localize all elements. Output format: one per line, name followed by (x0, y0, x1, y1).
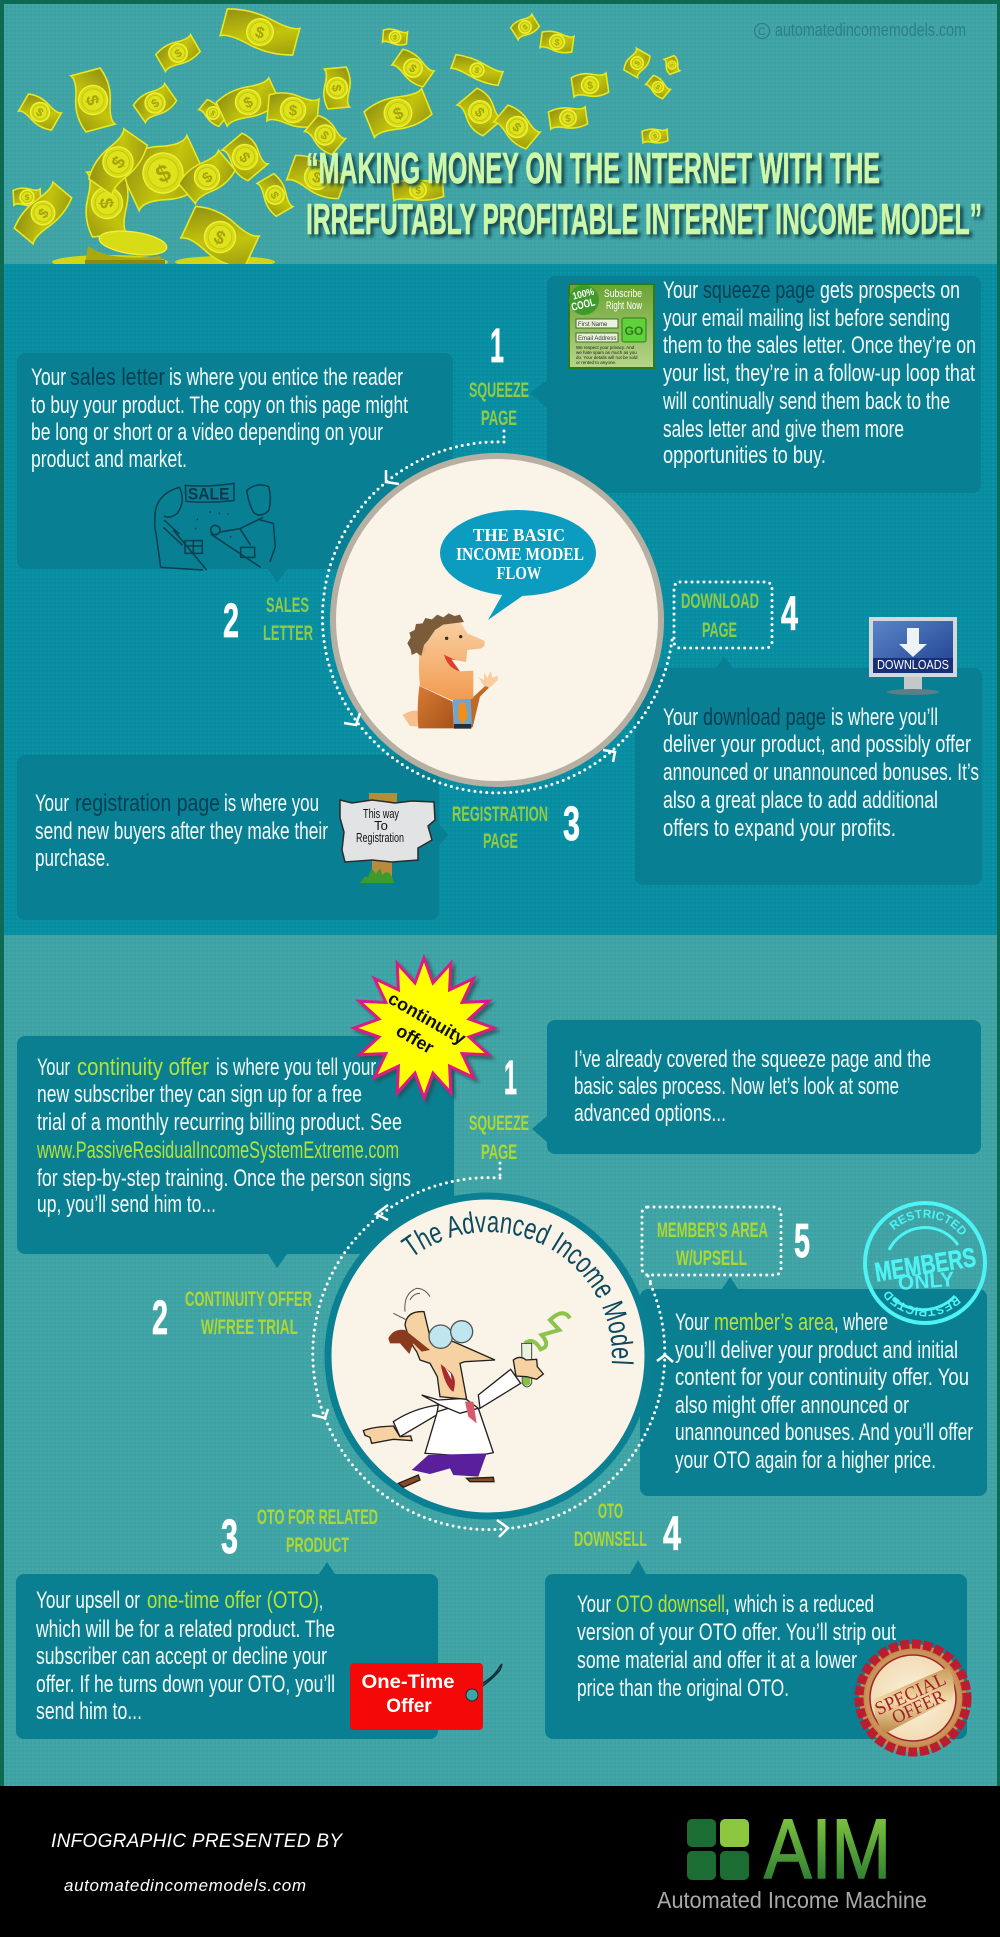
step 3: registration page: PAGE (483, 830, 518, 853)
icon: sale line drawing (155, 483, 275, 570)
step 5: member's area: 5 (794, 1215, 810, 1268)
icon: one-time offer tag: Offer (386, 1696, 432, 1717)
step 3: registration page: 3 (563, 798, 580, 851)
speech bubble: FLOW (496, 563, 542, 583)
step 4: download page: PAGE (702, 619, 737, 642)
step 4: download page: DOWNLOAD (681, 590, 759, 613)
starburst: continuity offer: continuity (385, 988, 469, 1048)
icon: subscribe form (569, 284, 654, 368)
text block: squeeze page (662, 277, 976, 469)
falling money illustration: $ (668, 63, 675, 68)
footer (0, 1786, 1000, 1937)
logo: AIM: Automated Income Machine (657, 1887, 927, 1913)
icon: downloads monitor: DOWNLOADS (877, 657, 949, 672)
icon: one-time offer tag (350, 1663, 502, 1730)
stamp: members only: RESTRICTED (889, 1210, 966, 1234)
text block: sales letter: product and market. (31, 446, 187, 473)
falling money illustration: $ (391, 104, 406, 124)
falling money illustration: $ (24, 192, 30, 202)
falling money illustration: $ (211, 226, 230, 249)
step 5: member's area: MEMBER’S AREA (657, 1219, 768, 1242)
falling money illustration: $ (82, 93, 104, 108)
text block: squeeze page: squeeze page (703, 277, 815, 304)
step 4: download page (674, 582, 798, 648)
icon: subscribe form: or rented to anyone. (576, 360, 616, 365)
seal: special offer: SPECIAL (872, 1669, 950, 1720)
falling money illustration: $ (587, 80, 594, 92)
footer credit: INFOGRAPHIC PRESENTED BY (51, 1831, 343, 1852)
text block: OTO downsell: Your (577, 1591, 611, 1618)
icon: registration sign (340, 793, 435, 883)
circle: advanced income model (324, 1192, 644, 1520)
text block: registration page: purchase. (35, 845, 110, 872)
step 2: continuity offer: W/FREE TRIAL (201, 1316, 298, 1339)
falling money illustration: $ (34, 205, 52, 221)
text block: download page: offers to expand your profits. (663, 815, 896, 842)
icon: subscribe form: Subscribe (604, 288, 642, 300)
falling money illustration: $ (199, 168, 217, 187)
step 1: squeeze page: SQUEEZE (469, 1112, 529, 1135)
icon: subscribe form: we hate spam as much as you (576, 350, 637, 355)
falling money illustration: $ (471, 105, 488, 120)
text block: sales letter: Your (31, 364, 66, 391)
step 4: OTO downsell: OTO (598, 1500, 623, 1523)
text block: continuity offer: up, you’ll send him to... (37, 1191, 216, 1218)
step 2: continuity offer (152, 1288, 312, 1345)
falling money illustration: $ (318, 128, 332, 143)
step 1: squeeze page (469, 1052, 529, 1164)
step 1: squeeze page: PAGE (481, 1141, 517, 1164)
icon: subscribe form: Right Now (606, 300, 642, 312)
text block: OTO downsell: price than the original OTO. (577, 1675, 789, 1702)
falling money illustration: $ (310, 169, 324, 188)
speech bubble: THE BASIC (473, 525, 565, 545)
flow ring: advanced model (312, 1163, 673, 1537)
footer credit (51, 1831, 343, 1895)
text block: download page: download page (703, 704, 826, 731)
step 1: squeeze page: 1 (490, 320, 504, 373)
icon: subscribe form: GO (625, 324, 643, 338)
text block: OTO downsell (577, 1591, 896, 1702)
watermark: C (758, 26, 766, 38)
text block: registration page: registration page (75, 790, 220, 817)
step 2: sales letter: LETTER (263, 622, 313, 645)
step 2: continuity offer: 2 (152, 1292, 168, 1345)
text block: one-time offer: one-time offer (OTO) (147, 1587, 319, 1614)
seal: special offer (859, 1644, 967, 1752)
text block: squeeze page: sales letter and give them more (663, 416, 904, 443)
starburst: continuity offer (354, 958, 494, 1098)
speech bubble: INCOME MODEL (456, 544, 584, 564)
arrow (312, 1409, 328, 1418)
step 5: member's area (642, 1207, 810, 1275)
step 1: squeeze page: SQUEEZE (469, 379, 529, 402)
text block: download page (663, 704, 979, 842)
text block: continuity offer: is where you tell your (216, 1054, 376, 1081)
text block: one-time offer (35, 1587, 335, 1725)
step 4: download page: 4 (781, 588, 798, 641)
text block: OTO downsell: some material and offer it at a lower (577, 1647, 857, 1674)
arrow (386, 470, 399, 484)
text block: sales letter: sales letter (70, 364, 165, 391)
text block: registration page: send new buyers after they make their (35, 818, 328, 845)
icon: subscribe form: First Name (578, 322, 608, 328)
stamp: members only: ONLY (897, 1268, 955, 1295)
step 2: sales letter: 2 (223, 595, 239, 648)
step 2: continuity offer: CONTINUITY OFFER (185, 1288, 312, 1311)
text block: download page: Your (663, 704, 698, 731)
icon: registration sign: Registration (356, 830, 404, 845)
text block: registration page (35, 790, 328, 872)
icon: downloads monitor (869, 617, 957, 695)
text block: continuity offer: www.PassiveResidualIncomeSystemExtreme.com (36, 1137, 399, 1164)
panel: download page (635, 617, 982, 885)
arrow (657, 1355, 673, 1362)
step 1: squeeze page: 1 (504, 1052, 517, 1105)
text block: continuity offer: new subscriber they can sign up for a free (37, 1081, 362, 1108)
step 2: sales letter: SALES (266, 594, 309, 617)
text block: continuity offer: Your (37, 1054, 70, 1081)
text block: recap: advanced options... (574, 1100, 726, 1127)
arrow (603, 750, 615, 762)
falling money illustration: $ (152, 159, 176, 189)
text block: registration page: is where you (224, 790, 319, 817)
stamp: members only (863, 1201, 987, 1325)
text block: download page: is where you’ll (831, 704, 938, 731)
text block: member's area: also might offer announced or (675, 1392, 909, 1419)
falling money illustration: $ (329, 84, 344, 92)
text block: squeeze page: Your (663, 277, 698, 304)
text block: member's area: member’s area (714, 1309, 834, 1336)
text block: member's area: Your (675, 1309, 709, 1336)
text block: continuity offer: for step-by-step training. Once the person signs (37, 1165, 411, 1192)
step 1: squeeze page: PAGE (481, 407, 517, 430)
text block: sales letter: be long or short or a video depending on your (31, 419, 383, 446)
step 2: sales letter (223, 594, 313, 648)
falling money illustration: $ (654, 84, 661, 92)
falling money illustration: $ (96, 197, 118, 210)
icon: mad scientist (363, 1288, 570, 1487)
falling money illustration: $ (253, 24, 266, 43)
step 4: OTO downsell: DOWNSELL (574, 1528, 647, 1551)
text block: one-time offer: offer. If he turns down your OTO, you’ll (36, 1671, 335, 1698)
falling money illustration: $ (653, 133, 658, 141)
icon: subscribe form: We respect your privacy. And (576, 345, 635, 350)
seal: special offer: OFFER (889, 1686, 949, 1729)
text block: one-time offer: Your upsell or (36, 1587, 140, 1614)
text block: one-time offer: subscriber can accept or decline your (36, 1643, 327, 1670)
icon: sale line drawing: SALE (188, 484, 229, 503)
arrow (376, 1205, 388, 1220)
circle: basic income model (333, 456, 661, 784)
text block: sales letter: is where you entice the reader (169, 364, 403, 391)
arrow (497, 1520, 508, 1537)
falling money illustration: $ (34, 106, 46, 120)
step 3: OTO for related product: PRODUCT (286, 1534, 349, 1557)
icon: subscribe form: do. Your details will not be sold (576, 355, 638, 360)
text block: sales letter: to buy your product. The copy on this page might (31, 392, 408, 419)
step 4: OTO downsell (574, 1500, 681, 1561)
step 3: OTO for related product (221, 1506, 378, 1564)
falling money illustration: $ (393, 34, 397, 42)
step 3: OTO for related product: 3 (221, 1511, 238, 1564)
text block: OTO downsell: version of your OTO offer. You’ll strip out (577, 1619, 896, 1646)
text block: one-time offer: , (319, 1587, 323, 1614)
icon: registration sign: This way (363, 806, 399, 821)
falling money illustration: $ (288, 102, 298, 120)
icon: cartoon man (403, 613, 498, 729)
falling money illustration: $ (565, 113, 572, 125)
falling money illustration: $ (473, 65, 481, 76)
text block: recap (574, 1046, 931, 1127)
falling money illustration: $ (509, 120, 524, 135)
panel: squeeze page recap (532, 1020, 981, 1154)
arrow (344, 713, 360, 725)
falling money illustration: $ (415, 185, 422, 197)
step 4: OTO downsell: 4 (663, 1508, 681, 1561)
text block: member's area (675, 1309, 973, 1474)
text block: continuity offer: continuity offer (77, 1054, 209, 1081)
footer credit: automatedincomemodels.com (64, 1876, 306, 1895)
falling money illustration: $ (632, 58, 643, 67)
panel: squeeze page (530, 276, 981, 493)
falling money illustration: $ (148, 95, 162, 111)
falling money illustration: $ (107, 153, 130, 172)
step 5: member's area: W/UPSELL (676, 1247, 747, 1270)
icon: subscribe form: 100% (571, 287, 595, 303)
falling money illustration: $ (235, 149, 254, 167)
icon: subscribe form: Email Address (578, 336, 616, 342)
text block: member's area: , where (834, 1309, 888, 1336)
text block: OTO downsell: OTO downsell (616, 1591, 725, 1618)
step 3: registration page (452, 798, 580, 853)
panel: continuity offer (17, 1036, 454, 1268)
starburst: continuity offer: offer (393, 1020, 437, 1058)
step 3: OTO for related product: OTO FOR RELATED (257, 1506, 378, 1529)
falling money illustration: $ (173, 47, 185, 61)
flow ring: basic model (322, 431, 672, 793)
panel: one-time offer (16, 1562, 502, 1739)
panel: OTO downsell (545, 1560, 967, 1752)
text block: one-time offer: send him to... (36, 1698, 142, 1725)
logo: AIM: AIM (764, 1802, 891, 1896)
icon: subscribe form: COOL (570, 296, 597, 314)
falling money illustration: $ (267, 190, 281, 202)
panel: sales letter (17, 353, 453, 583)
text block: OTO downsell: , which is a reduced (725, 1591, 874, 1618)
panel: registration page (17, 755, 448, 920)
text block: continuity offer (36, 1054, 411, 1218)
logo: AIM (657, 1802, 927, 1913)
step 3: registration page: REGISTRATION (452, 803, 548, 826)
falling money illustration: $ (521, 22, 530, 32)
falling money illustration: $ (554, 37, 560, 48)
falling money illustration (12, 6, 681, 272)
step 1: squeeze page (469, 320, 529, 430)
panel: member's area (640, 1201, 987, 1496)
falling money illustration: $ (406, 62, 419, 76)
text block: one-time offer: which will be for a related product. The (35, 1616, 335, 1643)
text block: continuity offer: trial of a monthly recurring billing product. See (37, 1109, 402, 1136)
speech bubble (440, 510, 596, 620)
falling money illustration: $ (208, 108, 218, 119)
stamp: members only: RESTRICTED (884, 1292, 961, 1316)
falling money illustration: $ (241, 93, 256, 112)
title (306, 144, 982, 244)
icon: one-time offer tag: One-Time (362, 1672, 454, 1693)
text block: sales letter (31, 364, 408, 473)
icon: registration sign: To (374, 818, 388, 833)
curved heading: The Advanced Income Model (400, 1211, 634, 1364)
text block: registration page: Your (35, 790, 69, 817)
text block: squeeze page: opportunities to buy. (663, 442, 826, 469)
money pile (52, 230, 275, 264)
